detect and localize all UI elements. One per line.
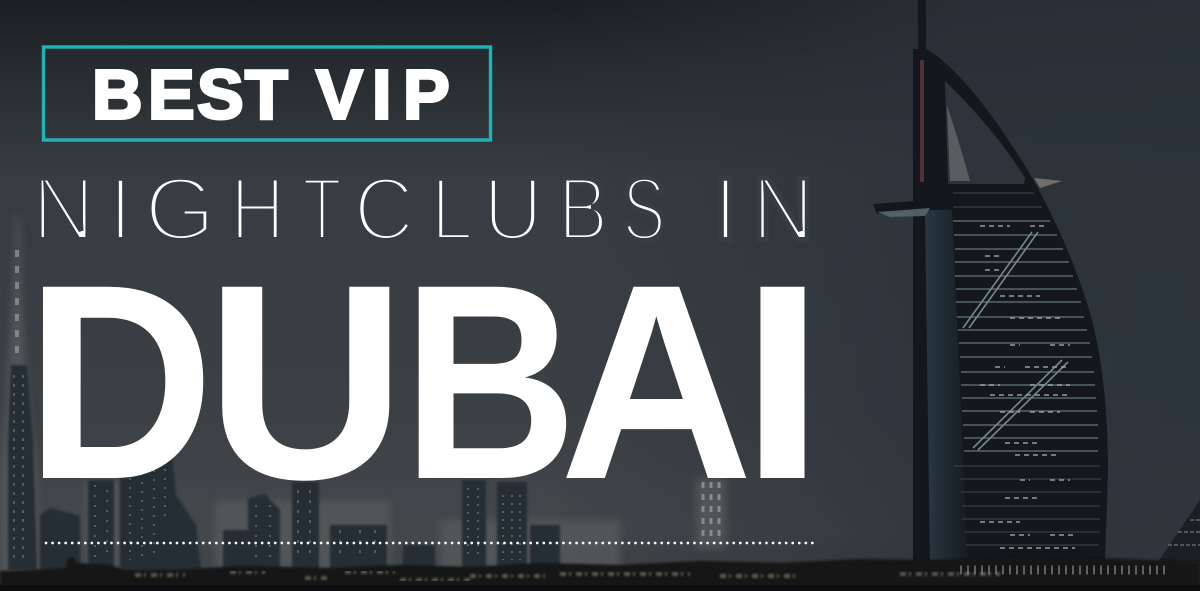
heading: NIGHTCLUBS IN	[32, 158, 814, 259]
heading: NIGHTCLUBS IN: I	[108, 158, 133, 258]
city skyline	[0, 215, 726, 591]
inner fabric	[947, 105, 970, 181]
heading: NIGHTCLUBS IN: G	[144, 160, 216, 259]
diagonal braces	[963, 232, 1068, 450]
heading: NIGHTCLUBS IN: S	[623, 160, 665, 259]
waterfront treeline and ground	[0, 557, 1200, 591]
heading: NIGHTCLUBS IN: C	[354, 160, 414, 259]
helipad	[873, 198, 958, 217]
heading: NIGHTCLUBS IN: B	[558, 160, 608, 259]
Burj Al Arab hotel	[873, 0, 1108, 562]
heading: DUBAI	[26, 226, 825, 538]
heading: NIGHTCLUBS IN: H	[230, 159, 285, 259]
heading: DUBAI: D	[26, 228, 214, 538]
heading: NIGHTCLUBS IN: N	[752, 159, 814, 259]
badge: BEST VIP: BEST VIP	[92, 56, 450, 134]
sail opening	[945, 81, 1025, 184]
red mast detail	[920, 60, 924, 182]
heading: NIGHTCLUBS IN: T	[302, 160, 342, 259]
heading: NIGHTCLUBS IN: L	[431, 159, 473, 259]
Jumeirah building at right edge	[1158, 500, 1200, 562]
heading: NIGHTCLUBS IN: I	[713, 158, 738, 258]
lit flash at roof	[1034, 178, 1062, 188]
hotel floors	[953, 193, 1101, 545]
mast and sail frame	[913, 0, 1108, 562]
badge: BEST VIP	[44, 47, 490, 140]
left pillar	[925, 210, 968, 562]
heading: DUBAI: I	[740, 226, 825, 537]
heading: DUBAI: B	[402, 227, 577, 538]
heading: DUBAI: U	[206, 226, 406, 537]
heading: NIGHTCLUBS IN: N	[32, 159, 95, 259]
dotted divider	[46, 542, 814, 544]
heading: NIGHTCLUBS IN: U	[483, 160, 543, 259]
heading: DUBAI: A	[560, 227, 753, 537]
hotel windows	[980, 226, 1075, 548]
